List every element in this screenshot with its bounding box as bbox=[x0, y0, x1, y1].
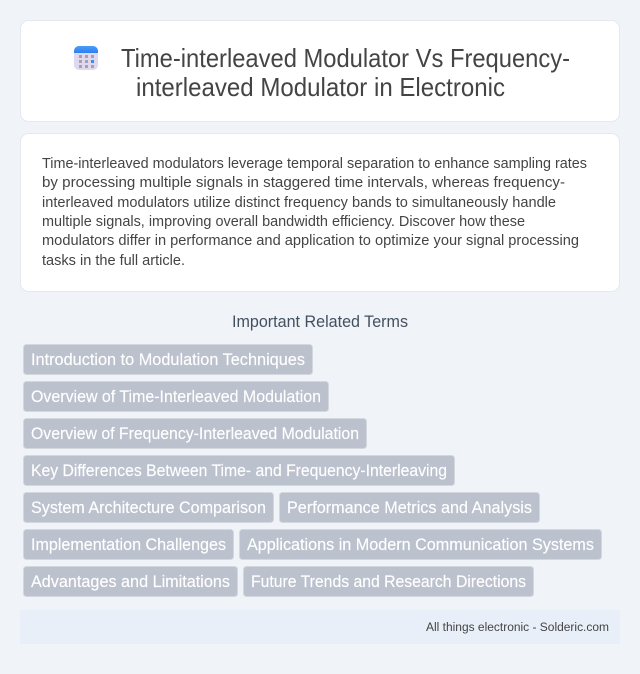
tag: System Architecture Comparison bbox=[31, 499, 266, 517]
text block: description: Time-interleaved modulators leverage temporal separation to enhance sampling rates bbox=[42, 155, 587, 172]
heading: related terms: Important Related Terms bbox=[232, 313, 408, 331]
text block: description bbox=[42, 155, 587, 269]
tag bbox=[24, 344, 312, 374]
text block: description: interleaved modulators utilize distinct frequency bands to simultaneously handle bbox=[42, 194, 556, 211]
title: interleaved Modulator in Electronic bbox=[136, 72, 505, 102]
footer: All things electronic - Solderic.com bbox=[426, 620, 609, 634]
tag: Future Trends and Research Directions bbox=[251, 573, 526, 591]
tag: Advantages and Limitations bbox=[31, 573, 230, 591]
footer bbox=[20, 610, 620, 644]
icon: calendar bbox=[74, 46, 98, 70]
text block: description: multiple signals, improving overall bandwidth efficiency. Discover how these bbox=[42, 213, 525, 230]
title bbox=[121, 43, 570, 102]
panel: description bbox=[20, 134, 620, 292]
tag: Implementation Challenges bbox=[31, 536, 226, 554]
tag: Applications in Modern Communication Systems bbox=[247, 536, 594, 554]
tag bbox=[24, 418, 366, 448]
tag list bbox=[24, 344, 602, 596]
title: Time-interleaved Modulator Vs Frequency- bbox=[121, 43, 570, 73]
tag bbox=[24, 382, 328, 412]
tag bbox=[24, 456, 454, 486]
tag: Performance Metrics and Analysis bbox=[287, 499, 532, 517]
tag bbox=[280, 492, 540, 522]
tag: Key Differences Between Time- and Frequency-Interleaving bbox=[31, 462, 447, 480]
tag bbox=[244, 566, 534, 596]
tag bbox=[24, 566, 238, 596]
tag: Overview of Frequency-Interleaved Modulation bbox=[31, 425, 359, 443]
text block: description: modulators differ in performance and application to optimize your signal processing bbox=[42, 232, 579, 249]
text block: description: tasks in the full article. bbox=[42, 252, 185, 269]
tag: Introduction to Modulation Techniques bbox=[31, 351, 305, 369]
text block: description: by processing multiple signals in staggered time intervals, whereas frequency- bbox=[42, 174, 565, 191]
tag bbox=[24, 530, 234, 560]
panel: title card bbox=[20, 20, 620, 122]
tag bbox=[240, 530, 602, 560]
tag bbox=[24, 492, 274, 522]
tag: Overview of Time-Interleaved Modulation bbox=[31, 388, 321, 406]
